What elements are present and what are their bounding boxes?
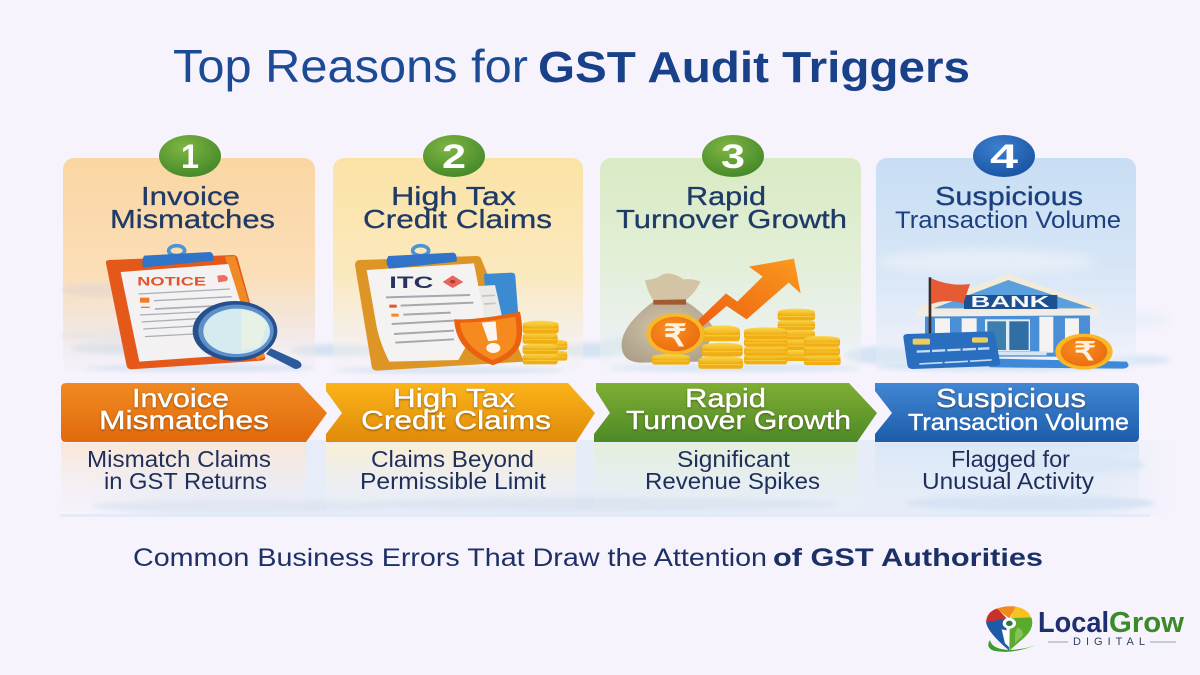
panel: high tax credit claims card bbox=[333, 158, 583, 372]
title: GST Audit Triggers bbox=[538, 43, 970, 92]
panel: claims description: Permissible Limit bbox=[360, 468, 547, 494]
clip bbox=[142, 246, 214, 267]
heading: invoice mismatches: Mismatches bbox=[110, 204, 275, 234]
logo: LocalGrow Digital bbox=[986, 606, 1184, 652]
icon: bank with flag, card and rupee coin: ₹ bbox=[1074, 338, 1096, 366]
title: Top Reasons for bbox=[173, 40, 528, 92]
heading: high tax credit claims bbox=[363, 181, 552, 234]
panel: rapid turnover growth card bbox=[600, 158, 861, 372]
logo: LocalGrow Digital: DIGITAL bbox=[1073, 636, 1145, 648]
panel: mismatch description bbox=[61, 443, 306, 511]
icon: ITC clipboard with warning shield and coins bbox=[355, 246, 567, 371]
banner: rapid turnover growth bbox=[594, 383, 877, 442]
banner: high tax credit claims: High Tax bbox=[393, 383, 515, 413]
heading: suspicious transaction volume bbox=[895, 181, 1121, 234]
icon: location pin bbox=[986, 606, 1040, 652]
banner: invoice mismatches: Mismatches bbox=[99, 405, 269, 435]
banner: invoice mismatches bbox=[61, 383, 327, 442]
subtitle bbox=[133, 544, 1043, 572]
panel: invoice mismatches card bbox=[62, 158, 315, 372]
heading: suspicious transaction volume: Suspicious bbox=[935, 181, 1083, 211]
number badge 4 bbox=[973, 135, 1035, 177]
banner: suspicious transaction volume bbox=[875, 383, 1139, 442]
panel: claims description bbox=[326, 443, 576, 511]
banner: rapid turnover growth: Rapid bbox=[685, 383, 766, 413]
heading: suspicious transaction volume: Transaction Volume bbox=[895, 207, 1121, 234]
logo: LocalGrow Digital: Grow bbox=[1109, 607, 1184, 639]
heading: rapid turnover growth: Turnover Growth bbox=[616, 204, 847, 234]
icon: money bag, rising arrow and coin stacks bbox=[622, 259, 841, 369]
banner: suspicious transaction volume: Transaction Volume bbox=[908, 409, 1129, 435]
subtitle: Common Business Errors That Draw the Attention bbox=[133, 544, 767, 572]
banner: suspicious transaction volume: Suspicious bbox=[936, 383, 1086, 413]
panel: revenue description bbox=[594, 443, 857, 511]
heading: rapid turnover growth: Rapid bbox=[686, 181, 766, 211]
panel: unusual activity description: Unusual Activity bbox=[922, 468, 1095, 494]
title bbox=[173, 40, 970, 92]
panel: claims description: Claims Beyond bbox=[371, 446, 534, 472]
banner: high tax credit claims bbox=[326, 383, 595, 442]
heading: high tax credit claims: Credit Claims bbox=[363, 204, 552, 234]
panel: mismatch description: in GST Returns bbox=[104, 468, 267, 494]
number badge 1 bbox=[159, 135, 221, 177]
heading: rapid turnover growth bbox=[616, 181, 847, 234]
number badge 1: 1 bbox=[181, 138, 199, 176]
heading: high tax credit claims: High Tax bbox=[391, 181, 516, 211]
banner: rapid turnover growth: Turnover Growth bbox=[626, 405, 851, 435]
panel: mismatch description: Mismatch Claims bbox=[87, 446, 271, 472]
panel: revenue description: Revenue Spikes bbox=[645, 468, 820, 494]
number badge 3: 3 bbox=[721, 138, 745, 176]
panel: suspicious transaction volume card bbox=[875, 158, 1136, 372]
number badge 2 bbox=[423, 135, 485, 177]
clip bbox=[387, 246, 457, 269]
logo: LocalGrow Digital: Local bbox=[1038, 607, 1109, 639]
number badge 4: 4 bbox=[990, 138, 1018, 176]
icon: clipboard notice with magnifier: NOTICE bbox=[137, 274, 206, 288]
icon: money bag, rising arrow and coin stacks: ₹ bbox=[664, 319, 687, 353]
subtitle: of GST Authorities bbox=[773, 544, 1043, 572]
panel: unusual activity description bbox=[875, 443, 1139, 511]
icon: clipboard notice with magnifier bbox=[106, 246, 302, 369]
heading: invoice mismatches: Invoice bbox=[141, 181, 240, 211]
number badge 3 bbox=[702, 135, 764, 177]
banner: invoice mismatches: Invoice bbox=[132, 383, 229, 413]
heading: invoice mismatches bbox=[110, 181, 275, 234]
banner: high tax credit claims: Credit Claims bbox=[361, 405, 551, 435]
icon: bank with flag, card and rupee coin: BANK bbox=[971, 294, 1049, 311]
panel: revenue description: Significant bbox=[677, 446, 791, 472]
panel: unusual activity description: Flagged for bbox=[951, 446, 1070, 472]
icon: bank with flag, card and rupee coin bbox=[903, 274, 1129, 370]
icon: ITC clipboard with warning shield and coins: ITC bbox=[389, 273, 433, 292]
number badge 2: 2 bbox=[442, 138, 466, 176]
